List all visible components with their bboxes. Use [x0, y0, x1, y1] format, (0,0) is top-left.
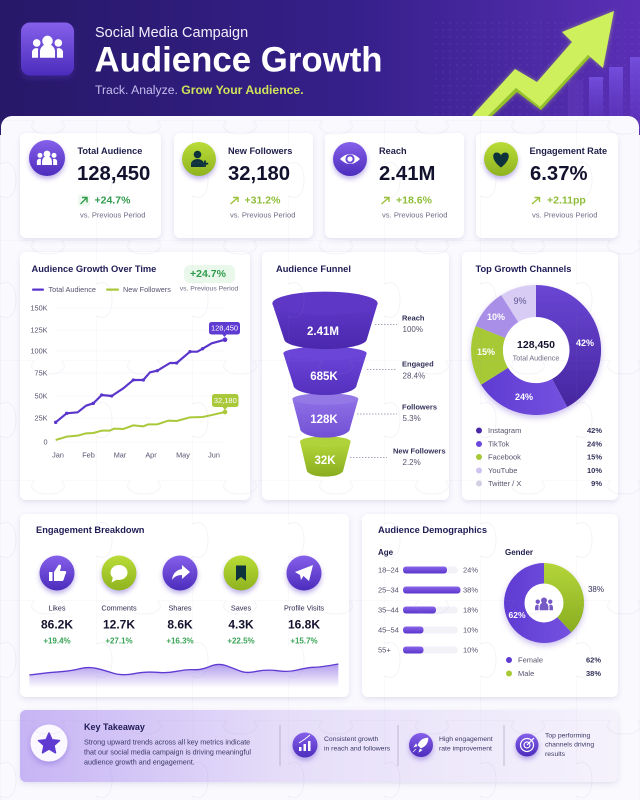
label: Saves: [231, 604, 251, 612]
icon: add person: [182, 142, 216, 176]
point: engagement: rate improvement: [439, 746, 492, 752]
value: 8.6K: [167, 618, 193, 632]
engagement sparkline: [29, 664, 338, 687]
panel: new followers: [174, 133, 313, 238]
age bars: 10%: [463, 646, 478, 654]
icon: paper plane: [286, 556, 322, 590]
gender donut: [504, 563, 584, 643]
icon: rocket: [409, 733, 433, 757]
funnel tier: reach: [272, 292, 378, 349]
gender heading: Gender: [505, 548, 533, 557]
metric change: +24.7%: [94, 194, 131, 206]
x axis labels: Jan: [52, 450, 64, 460]
comparison note: vs. Previous Period: [80, 210, 145, 220]
badge note: vs. Previous Period: [180, 286, 238, 292]
header subtitle: Social Media Campaign: [95, 25, 248, 41]
x axis labels: Feb: [82, 450, 95, 460]
gender legend: Female: [518, 656, 543, 664]
growth badge: +24.7%: [190, 268, 227, 280]
y axis labels: 100K: [30, 346, 48, 356]
age bars: 38%: [463, 586, 478, 594]
icon: thumbs up: [40, 556, 74, 590]
icon: chat bubble: [102, 556, 136, 590]
age bars: [378, 566, 478, 654]
value: 12.7K: [103, 618, 135, 632]
metric change: +31.2%: [244, 194, 281, 206]
icon: gender donut people: [535, 597, 553, 610]
header bars: [568, 57, 640, 120]
callout: new followers: 32,180: [214, 396, 237, 405]
age bars: 24%: [463, 566, 478, 574]
panel: engagement rate: [476, 133, 618, 238]
x axis labels: Apr: [145, 450, 157, 460]
metric label: Reach: [379, 146, 407, 156]
funnel values: 685K: [310, 371, 338, 383]
value: 4.3K: [228, 618, 254, 632]
age bars: 45–54: [378, 626, 399, 634]
panel: audience funnel: [262, 252, 449, 500]
channel legend: Facebook: [488, 452, 521, 462]
channel legend: 15%: [587, 452, 602, 462]
engagement heading: Engagement Breakdown: [36, 525, 145, 535]
donut labels: 24%: [515, 392, 533, 402]
callout: new followers: [212, 394, 238, 410]
channel legend: 10%: [587, 466, 602, 475]
metric change: +2.11pp: [547, 194, 586, 206]
donut hole: [503, 317, 569, 383]
text: Consistent growth: [324, 736, 379, 743]
funnel chart: [272, 292, 378, 477]
takeaway text: [84, 738, 251, 766]
female share: 62%: [508, 610, 526, 620]
metric: comments: [101, 556, 137, 646]
gender donut hole: [524, 584, 564, 622]
y axis labels: 0: [43, 438, 48, 446]
channel legend: 42%: [587, 426, 602, 435]
panel: audience demographics: [362, 514, 618, 697]
male share: 38%: [588, 585, 604, 594]
funnel connectors: [350, 324, 397, 458]
panel: growth line chart: [20, 252, 250, 500]
donut labels: 10%: [487, 312, 505, 322]
age heading: Age: [378, 548, 394, 557]
point: consistent growth: in reach and followers: [324, 746, 391, 752]
chart heading: Audience Growth Over Time: [32, 264, 156, 274]
channel legend: Instagram: [488, 426, 521, 435]
metric: likes: [40, 556, 74, 646]
gender legend: 38%: [586, 669, 601, 678]
change: +19.4%: [43, 636, 71, 646]
header banner: [0, 0, 640, 135]
icon: share arrow: [162, 556, 198, 590]
icon: audience app tile: [21, 22, 74, 76]
x axis labels: May: [176, 450, 190, 460]
metric change: [78, 194, 131, 206]
funnel tier: new followers: [300, 436, 351, 477]
demographics heading: Audience Demographics: [378, 525, 487, 535]
chart legend: Total Audience: [48, 285, 96, 294]
metric value: 2.41M: [379, 163, 435, 185]
tagline: Track. Analyze. Grow Your Audience.: [95, 83, 304, 97]
funnel tier: followers: [292, 393, 358, 438]
label: Comments: [101, 604, 137, 612]
funnel values: [307, 326, 339, 467]
takeaway heading: Key Takeaway: [84, 722, 145, 732]
funnel labels: Followers: [402, 402, 437, 412]
label: Profile Visits: [284, 604, 324, 612]
y axis labels: 125K: [30, 326, 48, 334]
comparison note: vs. Previous Period: [230, 210, 295, 220]
icon: bookmark: [224, 556, 258, 590]
panel: key takeaway: [20, 710, 618, 782]
donut chart: [471, 285, 601, 415]
age bars: 18%: [463, 606, 478, 614]
funnel heading: Audience Funnel: [276, 264, 351, 274]
panel: engagement breakdown: [20, 514, 349, 697]
metric: shares: [162, 556, 198, 646]
donut labels: [477, 296, 594, 402]
chart legend: [32, 285, 171, 294]
donut center label: Total Audience: [513, 354, 559, 362]
funnel labels: 100%: [402, 325, 423, 334]
metric: saves: [224, 556, 258, 646]
chart legend: New Followers: [123, 285, 171, 294]
panel: reach: [325, 133, 464, 238]
text: High engagement: [439, 736, 493, 743]
label: Likes: [48, 604, 66, 612]
point: top channels: results: [545, 751, 566, 758]
growth badge: [184, 265, 235, 283]
callout: total audience: 128,450: [211, 324, 238, 333]
funnel labels: [393, 314, 446, 467]
funnel values: 2.41M: [307, 326, 339, 338]
takeaway text: audience growth and engagement.: [84, 758, 195, 766]
channel legend: YouTube: [488, 466, 517, 475]
age bars: 25–34: [378, 586, 399, 594]
metric change: +18.6%: [396, 194, 433, 206]
x axis labels: Jun: [208, 450, 220, 460]
change: +22.5%: [227, 636, 255, 646]
value: 86.2K: [41, 618, 73, 632]
text: Top performing: [545, 732, 591, 740]
takeaway text: that our social media campaign is driving meaningful: [84, 748, 251, 756]
donut center value: 128,450: [517, 339, 555, 351]
point: top channels: channels driving: [545, 742, 594, 748]
funnel labels: New Followers: [393, 446, 446, 456]
metric value: 6.37%: [530, 163, 588, 185]
x axis labels: Mar: [114, 450, 127, 460]
point: consistent growth: [292, 732, 391, 758]
funnel labels: Reach: [402, 314, 425, 322]
funnel labels: 28.4%: [402, 372, 425, 380]
y axis labels: 50K: [35, 392, 48, 400]
funnel labels: 2.2%: [402, 458, 421, 467]
metric label: Engagement Rate: [530, 146, 607, 156]
panel: top growth channels: [462, 252, 618, 500]
channel legend: 24%: [587, 440, 602, 448]
gender legend: [506, 656, 601, 678]
donut labels: 9%: [513, 296, 527, 306]
age bars: 18–24: [378, 566, 399, 574]
channel legend: 9%: [591, 479, 602, 488]
comparison note: vs. Previous Period: [532, 210, 597, 220]
takeaway text: Strong upward trends across all key metrics indicate: [84, 738, 250, 746]
metric label: New Followers: [228, 146, 292, 156]
age bars: 35–44: [378, 606, 399, 614]
y axis labels: 75K: [35, 368, 48, 378]
callout: total audience: [209, 322, 240, 337]
donut labels: 42%: [576, 338, 594, 348]
funnel labels: Engaged: [402, 360, 434, 368]
y axis labels: 150K: [30, 304, 48, 312]
channel legend: [476, 426, 602, 488]
title: Audience Growth: [94, 40, 383, 80]
icon: people: [29, 140, 65, 176]
icon: growth arrow: [472, 11, 614, 116]
age bars: 10%: [463, 626, 478, 634]
age bars: 55+: [378, 646, 391, 654]
line: new followers: [56, 410, 227, 440]
icon: bars: [292, 732, 318, 758]
y axis labels: [30, 304, 48, 446]
gender legend: 62%: [586, 656, 601, 664]
metric value: 32,180: [228, 163, 290, 185]
channel legend: Twitter / X: [488, 479, 521, 488]
funnel values: 128K: [310, 414, 338, 426]
funnel labels: 5.3%: [402, 414, 421, 423]
change: +15.7%: [290, 636, 318, 646]
metric value: 128,450: [77, 163, 150, 185]
channel legend: TikTok: [488, 440, 510, 448]
comparison note: vs. Previous Period: [382, 210, 447, 220]
change: +27.1%: [105, 636, 133, 646]
metric label: Total Audience: [78, 146, 142, 156]
channels heading: Top Growth Channels: [476, 264, 571, 274]
icon: heart: [484, 142, 518, 176]
gender legend: Male: [518, 669, 534, 678]
change: +16.3%: [166, 636, 194, 646]
funnel tier: engaged: [283, 347, 367, 395]
x axis labels: [52, 450, 220, 460]
line: total audience: [54, 337, 227, 424]
icon: target: [516, 734, 538, 756]
donut labels: 15%: [477, 347, 495, 357]
y axis labels: 25K: [35, 414, 48, 422]
icon: star: [30, 724, 68, 762]
funnel values: 32K: [314, 455, 336, 467]
metric: profile visits: [284, 556, 324, 646]
value: 16.8K: [288, 618, 320, 632]
point: top channels: [516, 732, 594, 758]
point: engagement: [409, 733, 493, 757]
icon: eye: [333, 142, 367, 176]
label: Shares: [168, 604, 192, 612]
panel: total audience: [20, 133, 161, 238]
